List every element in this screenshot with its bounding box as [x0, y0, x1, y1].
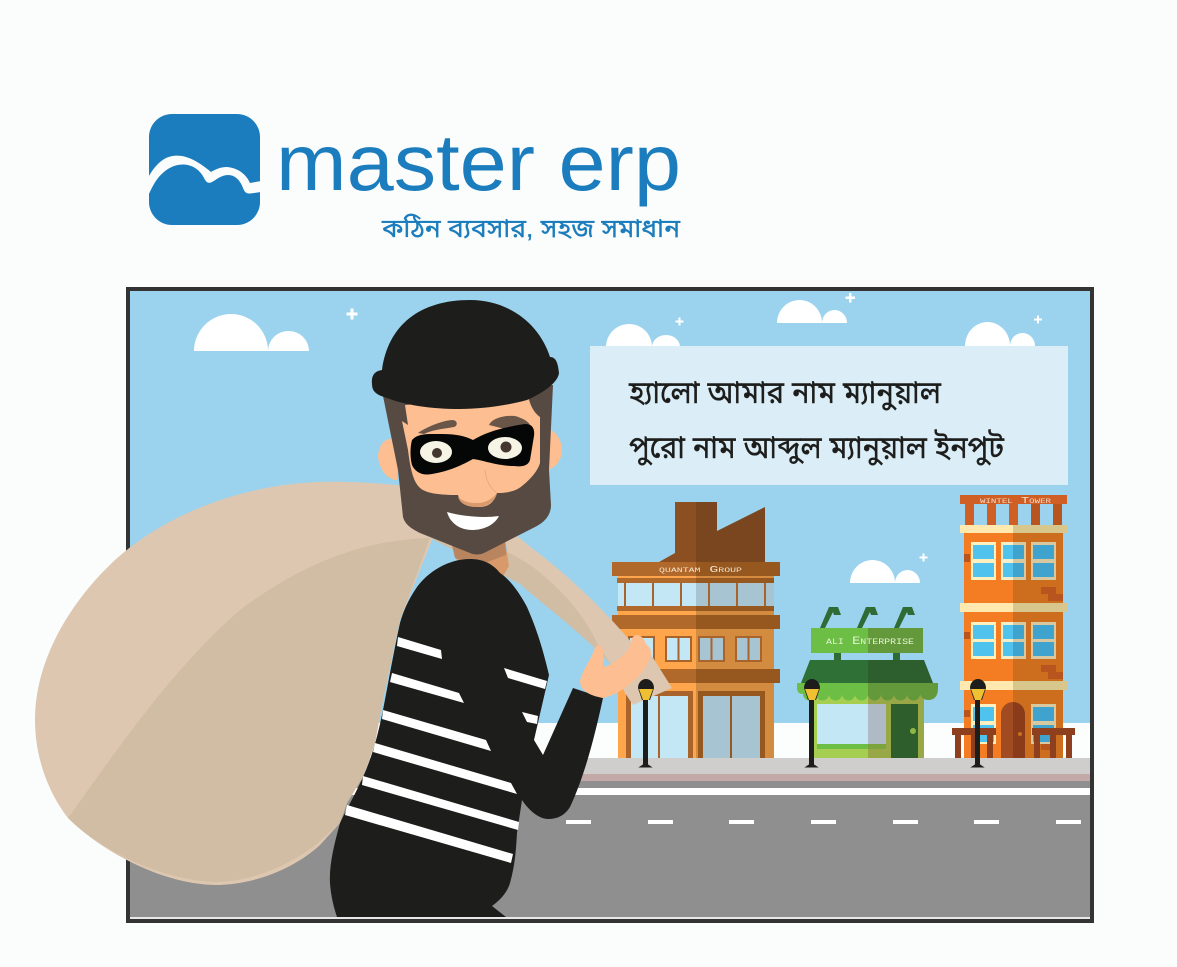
character: thief with sack	[35, 300, 986, 917]
building: Quantam Group	[612, 502, 780, 758]
logo	[147, 114, 681, 243]
road dashes	[566, 820, 1081, 824]
strap and tab	[430, 522, 672, 705]
neck	[452, 540, 509, 590]
icon: cloud logo	[147, 114, 261, 225]
building: Quantam Group: quantam Group	[659, 565, 743, 575]
building: Wintel Tower	[952, 495, 1075, 758]
benches	[952, 728, 1075, 758]
smile	[447, 512, 499, 530]
mask	[410, 424, 534, 475]
eyes	[420, 441, 452, 463]
eyebrows	[418, 420, 457, 434]
hand	[580, 635, 651, 698]
face skin	[402, 395, 540, 507]
wordmark: master erp	[276, 118, 681, 207]
building: Ali Enterprise: ali Enterprise	[826, 636, 914, 648]
callout text line 1: হ্যালো আমার নাম ম্যানুয়াল	[628, 375, 941, 410]
callout box	[590, 346, 1068, 485]
head	[372, 300, 562, 554]
building: Ali Enterprise	[797, 607, 938, 758]
building: Wintel Tower: wintel Tower	[980, 496, 1052, 506]
clouds	[194, 300, 1035, 583]
panel: street scene	[128, 289, 1092, 921]
nose	[458, 493, 497, 507]
beanie hat	[372, 300, 559, 409]
frame	[128, 289, 1092, 921]
sky	[130, 291, 1090, 723]
lamp post 1	[638, 679, 654, 767]
beard and hair	[383, 385, 553, 554]
callout text line 2: পুরো নাম আব্দুল ম্যানুয়াল ইনপুট	[629, 430, 1005, 465]
striped shirt	[330, 559, 603, 917]
ears	[378, 439, 397, 480]
ground	[130, 723, 1090, 919]
nose crease	[485, 470, 497, 493]
lamp post 2	[804, 679, 820, 767]
lamp post 3	[970, 679, 986, 767]
sack	[35, 482, 440, 885]
tagline: কঠিন ব্যবসার, সহজ সমাধান	[381, 213, 680, 243]
sparkles	[346, 293, 1042, 562]
